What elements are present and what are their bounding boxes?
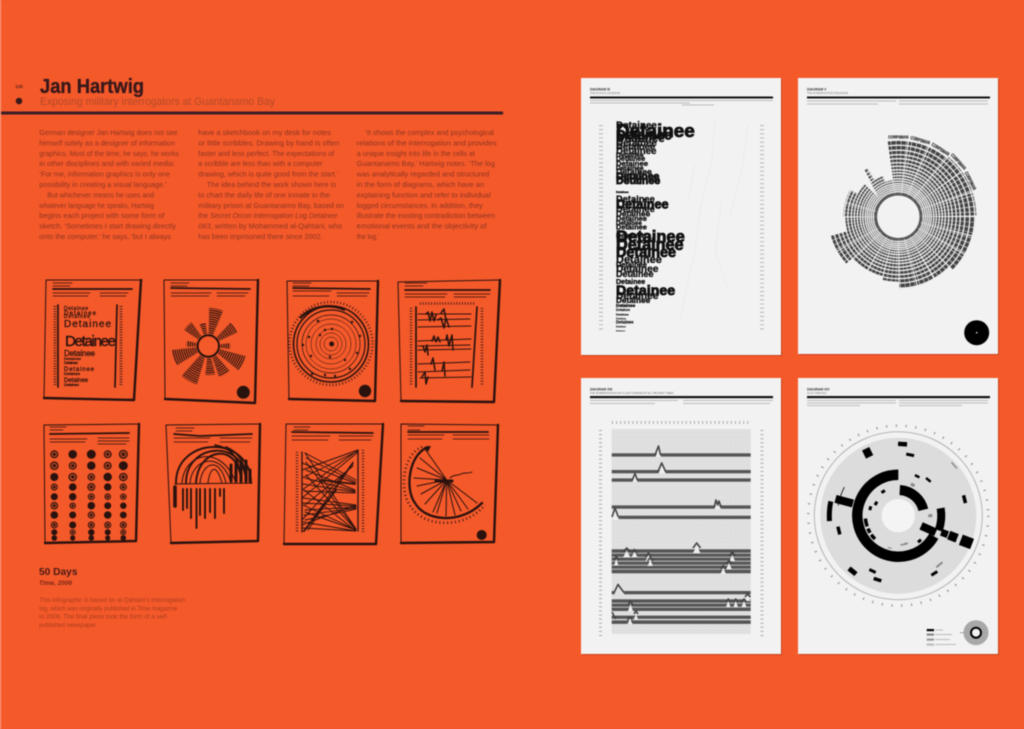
Detainee word stack: Detainee bbox=[616, 330, 626, 332]
body text: column 3: relations of the interrogation and provides bbox=[357, 138, 497, 147]
caption text bbox=[39, 597, 186, 629]
body text: column 2: military prison at Guantanamo Bay, based on bbox=[198, 201, 344, 210]
Detainee word stack: Detainee bbox=[616, 291, 659, 302]
icon: mini chart key bbox=[960, 620, 988, 645]
circular chart bbox=[808, 426, 988, 606]
diagram III rule bbox=[590, 96, 773, 98]
body text: column 1: in other disciplines and with varied media: bbox=[39, 159, 175, 168]
sketch 1: Detainee word stack: Detainee bbox=[64, 371, 81, 376]
header rule bbox=[1, 112, 503, 114]
body text: column 1: possibility in creating a visual language.’ bbox=[39, 180, 167, 189]
Detainee word stack: Detainee bbox=[616, 138, 657, 149]
body text: column 1 bbox=[38, 128, 179, 241]
Detainee word stack: Detainee bbox=[616, 140, 655, 152]
caption heading: 50 Days bbox=[39, 566, 78, 578]
body text: column 3: explaining function and refer to individual bbox=[357, 190, 491, 199]
panel: diagram XIV circular chart bbox=[798, 378, 999, 655]
body text: column 2: drawing, which is quite good from the start.’ bbox=[198, 170, 339, 179]
body text: column 1: German designer Jan Hartwig does not see bbox=[39, 128, 178, 137]
Detainee word stack: Detainee bbox=[616, 128, 672, 142]
Detainee word stack: Detainee bbox=[616, 214, 647, 223]
sketch 1: Detainee word stack: Detainee bbox=[64, 349, 96, 358]
panel: diagram XIII timeline chart bbox=[581, 378, 782, 655]
panel: diagram V radial chart bbox=[798, 78, 999, 355]
sketch 2: sunburst bbox=[164, 280, 258, 403]
title: Jan Hartwig bbox=[40, 76, 144, 98]
radial chart: CORPSMAN bbox=[888, 135, 909, 141]
Detainee word stack: Detainee bbox=[616, 190, 629, 194]
axis ticks bbox=[600, 422, 762, 636]
Detainee word stack: Detainee bbox=[616, 194, 655, 204]
body text: column 2: The idea behind the work shown here is bbox=[207, 180, 336, 189]
sketch 1: Detainee word stack: Detainee bbox=[64, 378, 89, 384]
Detainee word stack: Detainee bbox=[616, 264, 659, 275]
Detainee word stack: Detainee bbox=[616, 308, 630, 312]
page number: 126 bbox=[15, 84, 23, 89]
Detainee word stack: Detainee bbox=[616, 172, 660, 182]
diagram III subheading: THE 50 DAYS CALENDAR bbox=[590, 92, 620, 95]
body text: column 1: whatever language he speaks, Hartwig bbox=[38, 201, 154, 210]
Detainee word stack: Detainee bbox=[616, 296, 651, 305]
Detainee word stack: Detainee bbox=[616, 260, 647, 269]
body text: column 2: has been imprisoned there since 2002. bbox=[198, 232, 323, 241]
Detainee word stack: Detainee bbox=[616, 303, 636, 308]
body text: column 2: have a sketchbook on my desk for notes bbox=[198, 128, 331, 137]
sketch 1: Detainee word stack: Detainee bbox=[64, 356, 82, 361]
Detainee word stack: Detainee bbox=[616, 132, 665, 145]
body text: column 1: sketch. ‘Sometimes I start drawing directly bbox=[39, 222, 176, 231]
sketch 1: Detainee word stack bbox=[44, 280, 142, 400]
body text: column 2: or little scribbles. Drawing by hand is often bbox=[198, 138, 339, 147]
body text: column 1: But whichever means he uses and bbox=[47, 190, 154, 199]
Detainee word stack: Detainee bbox=[616, 283, 675, 299]
sketch 8: fan arc bbox=[401, 424, 498, 543]
sketch 5: circle grid bbox=[44, 424, 139, 543]
diagram XIII rule bbox=[590, 396, 773, 398]
sketch 1: Detainee word stack: Detainee bbox=[64, 311, 97, 317]
sketch 1: Detainee word stack: Detainee bbox=[64, 319, 111, 330]
diagram XIII heading: DIAGRAM XIII bbox=[590, 388, 612, 392]
radial chart: CORPSMAN bbox=[930, 142, 951, 158]
Detainee word stack: Detainee bbox=[616, 312, 629, 316]
Detainee word stack: Detainee bbox=[616, 236, 683, 254]
sketch 1: Detainee word stack: Detainee bbox=[64, 382, 80, 387]
body text: column 1: himself solely as a designer of information bbox=[39, 138, 175, 147]
body text: column 3: logged circumstances. In addition, they bbox=[357, 201, 483, 210]
icon: vinyl disc bbox=[964, 320, 989, 345]
body text: column 2: to chart the daily life of one inmate in the bbox=[198, 190, 330, 199]
sketch 1: Detainee word stack: Detainee bbox=[65, 333, 116, 350]
diagram XIV rule bbox=[807, 396, 990, 398]
Detainee word stack: Detainee bbox=[616, 166, 652, 176]
Detainee word stack: Detainee bbox=[616, 204, 655, 214]
body text: column 2: faster and less perfect. The expectations of bbox=[198, 149, 335, 158]
diagram V heading: DIAGRAM V bbox=[807, 88, 827, 92]
body text: column 1: begins each project with some form of bbox=[39, 211, 165, 220]
legend bbox=[927, 629, 956, 646]
Detainee word stack bbox=[616, 120, 695, 332]
body text: column 2: 063, written by Mohammed al-Qahtani, who bbox=[198, 222, 342, 231]
diagram V rule bbox=[807, 96, 990, 98]
sketch 6: arches and hanging bars bbox=[166, 424, 260, 543]
caption text: log, which was originally published in Time magazine bbox=[39, 605, 178, 612]
subtitle: Exposing military interrogators at Guantanamo Bay bbox=[40, 96, 275, 108]
body text: column 2: a scribble are less than with a computer bbox=[198, 159, 323, 168]
body text: column 3: Guantanamo Bay,’ Hartwig notes. ‘The log bbox=[357, 159, 495, 168]
body text: column 3: ‘It shows the complex and psychological bbox=[365, 128, 494, 137]
sketch 7: crossing lines bbox=[284, 424, 383, 544]
Detainee word stack: Detainee bbox=[616, 254, 662, 266]
sketch 1: Detainee word stack: Detainee bbox=[64, 360, 79, 365]
body text: column 3: in the form of diagrams, which have an bbox=[357, 180, 484, 189]
body text: column 1: graphics. Most of the time, he says, he works bbox=[39, 149, 179, 158]
body text: column 2: the Secret Orcon Interrogation Log Detainee bbox=[198, 211, 337, 220]
Detainee word stack: Detainee bbox=[616, 318, 627, 320]
Detainee word stack: Detainee bbox=[616, 165, 644, 172]
Detainee word stack: Detainee bbox=[616, 245, 676, 261]
diagram III heading: DIAGRAM III bbox=[590, 88, 610, 92]
Detainee word stack: Detainee bbox=[616, 220, 642, 227]
diagram V subheading: THE INTERROGATION SEQUENCE bbox=[807, 92, 848, 95]
icon: section marker bbox=[16, 98, 22, 104]
sketch 4: timeline rows with spikes bbox=[398, 280, 500, 402]
Detainee word stack: Detainee bbox=[616, 156, 645, 163]
diagram XIV subheading: ALSO TRIBUNAL bbox=[807, 392, 827, 395]
Detainee word stack: Detainee bbox=[616, 320, 634, 324]
sketch 3: concentric rings bbox=[287, 281, 378, 401]
radial chart: CORPSMAN bbox=[910, 135, 931, 147]
body text: column 3: was analytically regarded and structured bbox=[356, 170, 489, 179]
Detainee word stack: Detainee bbox=[616, 279, 645, 286]
body text: column 3: a unique insight into life in the cells at bbox=[357, 149, 475, 158]
Detainee word stack: Detainee bbox=[616, 146, 657, 157]
body text: column 1: onto the computer,’ he says, ‘but I always bbox=[39, 232, 171, 241]
Detainee word stack: Detainee bbox=[616, 120, 657, 132]
caption text: in 2006. The final piece took the form of a self- bbox=[39, 614, 168, 621]
body text: column 1: ‘For me, information graphics is only one bbox=[39, 170, 170, 179]
radial chart: CORPSMAN bbox=[963, 171, 977, 192]
sketch 1: Detainee word stack: Detainee bbox=[64, 314, 90, 320]
diagram XIV heading: DIAGRAM XIV bbox=[807, 388, 830, 392]
sketch 1: Detainee word stack: Detainee bbox=[64, 306, 88, 312]
timeline chart bbox=[612, 429, 751, 634]
Detainee word stack: Detainee bbox=[616, 159, 649, 168]
Detainee word stack: Detainee bbox=[616, 198, 668, 212]
Detainee word stack: Detainee bbox=[616, 121, 695, 142]
Detainee word stack: Detainee bbox=[616, 269, 654, 279]
body text: column 3: the log.’ bbox=[357, 232, 380, 241]
Detainee word stack: Detainee bbox=[616, 222, 647, 232]
sketch 1: Detainee word stack: Detainee bbox=[64, 367, 95, 373]
body text: column 3: emotional events and the objectivity of bbox=[357, 222, 488, 231]
day ticks bbox=[601, 125, 762, 331]
radial chart bbox=[822, 135, 977, 293]
Detainee word stack: Detainee bbox=[616, 228, 685, 246]
Detainee word stack: Detainee bbox=[616, 233, 645, 240]
Detainee word stack: Detainee bbox=[616, 210, 651, 218]
caption text: This infographic is based on al-Qahtani’s interrogation bbox=[39, 597, 186, 604]
Detainee word stack: Detainee bbox=[616, 152, 644, 159]
Detainee word stack: Detainee bbox=[616, 326, 627, 328]
Detainee word stack: Detainee bbox=[616, 175, 660, 187]
body text: column 3 bbox=[356, 128, 497, 241]
body text: column 2 bbox=[198, 128, 344, 241]
caption text: published newspaper. bbox=[39, 622, 98, 629]
radial chart: CORPSMAN bbox=[949, 153, 967, 172]
panel: diagram III Detainee words bbox=[581, 78, 782, 356]
caption subheading: Time, 2006 bbox=[39, 580, 73, 587]
diagram XIII subheading: THE INTERROGATION DAY X LAST CHANGE OF ALL THE MANY TIMES bbox=[590, 392, 674, 395]
body text: column 3: illustrate the existing contradiction between bbox=[357, 211, 495, 220]
